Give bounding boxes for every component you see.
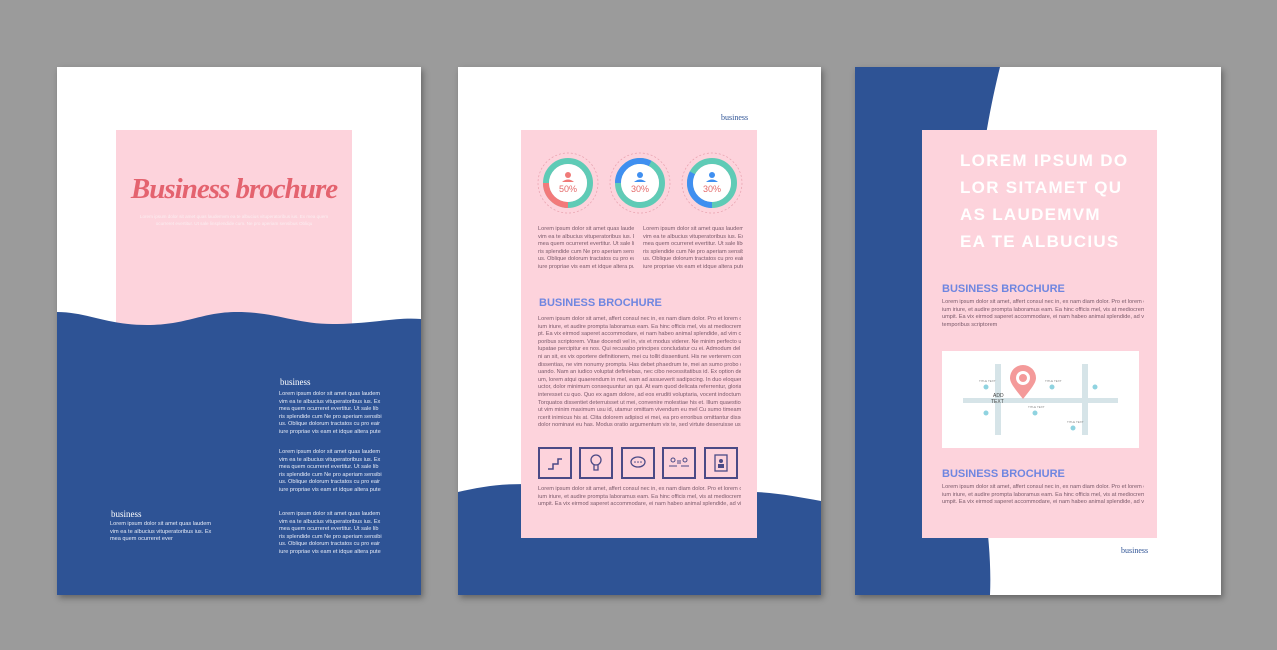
- two-column text: [538, 226, 634, 270]
- header label: business: [721, 113, 748, 122]
- text block left: [110, 509, 212, 542]
- subtitle text: [140, 214, 328, 226]
- main text: rcerit inimicus his at. Clita dolorem adipisci ei mei, ea pro erroribus omittantur disse: [538, 415, 741, 421]
- map: TEXT: [991, 399, 1004, 405]
- heading: BUSINESS BROCHURE: [539, 297, 662, 309]
- text block right: iure propriae vis eam et idque altera pute: [279, 487, 381, 493]
- text block right: ris splendide cum Ne pro aperiam sensibi: [279, 414, 382, 420]
- pink cover panel: [116, 130, 352, 330]
- icon row: [538, 447, 738, 479]
- map: TITLE TEXT: [1045, 379, 1062, 383]
- page 1: cover: [57, 67, 421, 595]
- pink panel: [922, 130, 1157, 538]
- text 1: temporibus scriptorem: [942, 322, 997, 328]
- pink panel: mea quem ocurreret evertitur. Ut sale libe: [643, 241, 743, 247]
- main text: [538, 316, 741, 428]
- subtitle text: ocurreret evertitur. Ut sale linsplendide cum. Ne pro aperiam sensibus Obliqu: [156, 221, 312, 226]
- text block right: [279, 377, 382, 555]
- blue side curve: [855, 67, 1000, 595]
- text block left: Lorem ipsum dolor sit amet quas laudem: [110, 521, 211, 527]
- headline: EA TE ALBUCIUS: [960, 232, 1120, 251]
- text 2: [942, 484, 1144, 505]
- text block right: vim ea te albucius vituperatoribus ius. Ex: [279, 457, 380, 463]
- text block right: iure propriae vis eam et idque altera pute: [279, 549, 381, 555]
- main text: uctor, dolor minimum consequuntur an qui. At eam quod delicata referrentur, gloriat: [538, 384, 741, 390]
- main text: lupatae percipitur ex nos. Qui recusabo principes concludatur cu ei. Admodum del: [538, 346, 740, 352]
- map: TITLE TEXT: [1028, 405, 1045, 409]
- icon: chat: [621, 447, 655, 479]
- text block left: vim ea te albucius vituperatoribus ius. Ex: [110, 529, 211, 535]
- text 1: [942, 299, 1144, 328]
- subtitle text: Lorem ipsum dolor sit amet quas laudemvm ea te albucius vituperatoribus ius. Ex mea quem: [140, 214, 328, 219]
- headline: AS LAUDEMVM: [960, 205, 1101, 224]
- icon: people equal: [662, 447, 696, 479]
- text block right: Lorem ipsum dolor sit amet quas laudem: [279, 449, 380, 455]
- text block right: ris splendide cum Ne pro aperiam sensibi: [279, 472, 382, 478]
- text block right: business: [280, 377, 311, 387]
- icon: stairs: [538, 447, 572, 479]
- map: TITLE TEXT: [1067, 420, 1084, 424]
- text block right: mea quem ocurreret evertitur. Ut sale lib: [279, 464, 378, 470]
- headline: LOREM IPSUM DO: [960, 151, 1128, 170]
- text block right: Lorem ipsum dolor sit amet quas laudem: [279, 511, 380, 517]
- donut charts: 30%: [631, 184, 649, 194]
- page 3: back: [855, 67, 1221, 595]
- icon: bulb: [579, 447, 613, 479]
- title: Business brochure: [131, 173, 337, 205]
- map: ADD: [993, 393, 1004, 399]
- icon: badge: [704, 447, 738, 479]
- text block left: business: [111, 509, 142, 519]
- map: [942, 351, 1139, 448]
- pink panel: [521, 130, 757, 538]
- text block right: iure propriae vis eam et idque altera pute: [279, 429, 381, 435]
- text block right: mea quem ocurreret evertitur. Ut sale lib: [279, 526, 378, 532]
- text block right: us. Oblique dolorum tractatos cu pro eair: [279, 541, 380, 547]
- text block right: vim ea te albucius vituperatoribus ius. Ex: [279, 519, 380, 525]
- text block left: mea quem ocurreret ever: [110, 536, 173, 542]
- donut charts: 50%: [559, 184, 577, 194]
- text block right: ris splendide cum Ne pro aperiam sensibi: [279, 534, 382, 540]
- text block right: Lorem ipsum dolor sit amet quas laudem: [279, 391, 380, 397]
- pink panel: Lorem ipsum dolor sit amet quas laudem: [643, 226, 743, 232]
- heading 1: BUSINESS BROCHURE: [942, 283, 1065, 295]
- heading 2: BUSINESS BROCHURE: [942, 468, 1065, 480]
- text block right: us. Oblique dolorum tractatos cu pro eair: [279, 479, 380, 485]
- map: TITLE TEXT: [979, 379, 996, 383]
- text block right: mea quem ocurreret evertitur. Ut sale lib: [279, 406, 378, 412]
- donut charts: 30%: [703, 184, 721, 194]
- headline: [960, 151, 1128, 251]
- text block right: us. Oblique dolorum tractatos cu pro eair: [279, 421, 380, 427]
- headline: LOR SITAMET QU: [960, 178, 1122, 197]
- text block right: vim ea te albucius vituperatoribus ius. Ex: [279, 399, 380, 405]
- donut charts: [538, 152, 742, 214]
- blue wave: [57, 312, 421, 595]
- pink panel: iure propriae vis eam et idque altera putei: [643, 264, 743, 270]
- footer label: business: [1121, 546, 1148, 555]
- blue bottom wave: [458, 484, 821, 595]
- page 2: inner: [458, 67, 821, 595]
- footer text: [538, 486, 741, 507]
